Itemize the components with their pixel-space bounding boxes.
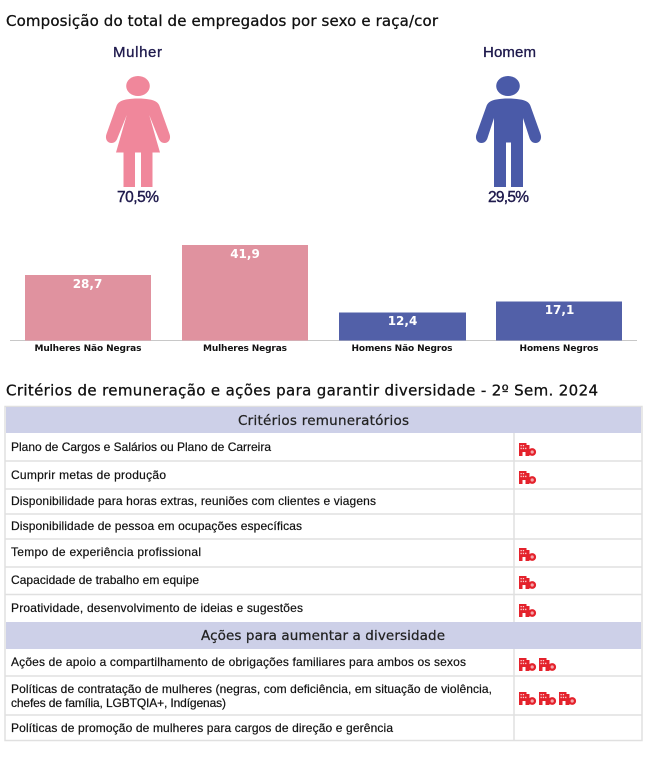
header: critérios remuneratórios [6,407,641,433]
row: apoio: Ações de apoio a compartilhamento de obrigações familiares para ambos os sexos [11,655,466,669]
row: equipe: Capacidade de trabalho em equipe [11,573,199,587]
row: contratação: chefes de família, LGBTQIA+, Indígenas) [11,696,226,710]
bar: Homens Não Negros: Homens Não Negros [352,344,452,354]
row: proatividade: Proatividade, desenvolvimento de ideias e sugestões [11,601,303,615]
header: ações [6,622,641,649]
bar: Mulheres Negras: 41,9 [230,247,260,261]
table [5,406,642,740]
row: contratação: Políticas de contratação de mulheres (negras, com deficiência, em situação de violência, [11,682,492,696]
row: plano de cargos [11,440,536,456]
panel: mulher [106,44,170,206]
row: proatividade [11,601,536,617]
bar: Mulheres Não Negras [25,275,151,354]
row: experiência [11,545,536,561]
label: Mulher: Mulher [113,44,162,61]
row: contratação [11,682,576,710]
bar: Homens Não Negros [339,312,466,354]
bar: Homens Negros [496,302,622,354]
value: 29,5%: 29,5% [488,189,529,206]
value: 70,5%: 70,5% [117,189,159,206]
row: horas extras: Disponibilidade para horas extras, reuniões com clientes e viagens [11,494,376,508]
bar: Mulheres Não Negras: 28,7 [73,277,102,291]
row: plano de cargos: Plano de Cargos e Salários ou Plano de Carreira [11,440,271,454]
bar: Homens Negros: Homens Negros [520,344,598,354]
header: critérios remuneratórios: Critérios remuneratórios [238,413,409,429]
bar: Mulheres Negras [182,245,308,354]
bar: Mulheres Negras: Mulheres Negras [203,344,287,354]
row: ocupações: Disponibilidade de pessoa em ocupações específicas [11,519,302,533]
header: ações: Ações para aumentar a diversidade [201,628,445,644]
title: composição: Composição do total de empregados por sexo e raça/cor [6,12,439,30]
row: experiência: Tempo de experiência profissional [11,545,201,559]
label: Homem: Homem [483,44,536,61]
row: promoção: Políticas de promoção de mulheres para cargos de direção e gerência [11,721,393,735]
row: metas [11,468,536,484]
icon: woman [106,76,170,187]
row: metas: Cumprir metas de produção [11,468,166,482]
bar: Mulheres Não Negras: Mulheres Não Negras [34,344,142,354]
icon: man [476,76,541,187]
title: critérios: Critérios de remuneração e ações para garantir diversidade - 2º Sem. 2024 [6,382,598,400]
row: equipe [11,573,536,589]
bar: Homens Não Negros: 12,4 [388,314,417,328]
bar: Homens Negros: 17,1 [545,303,574,317]
bar chart [10,245,637,354]
panel: homem [476,44,541,206]
